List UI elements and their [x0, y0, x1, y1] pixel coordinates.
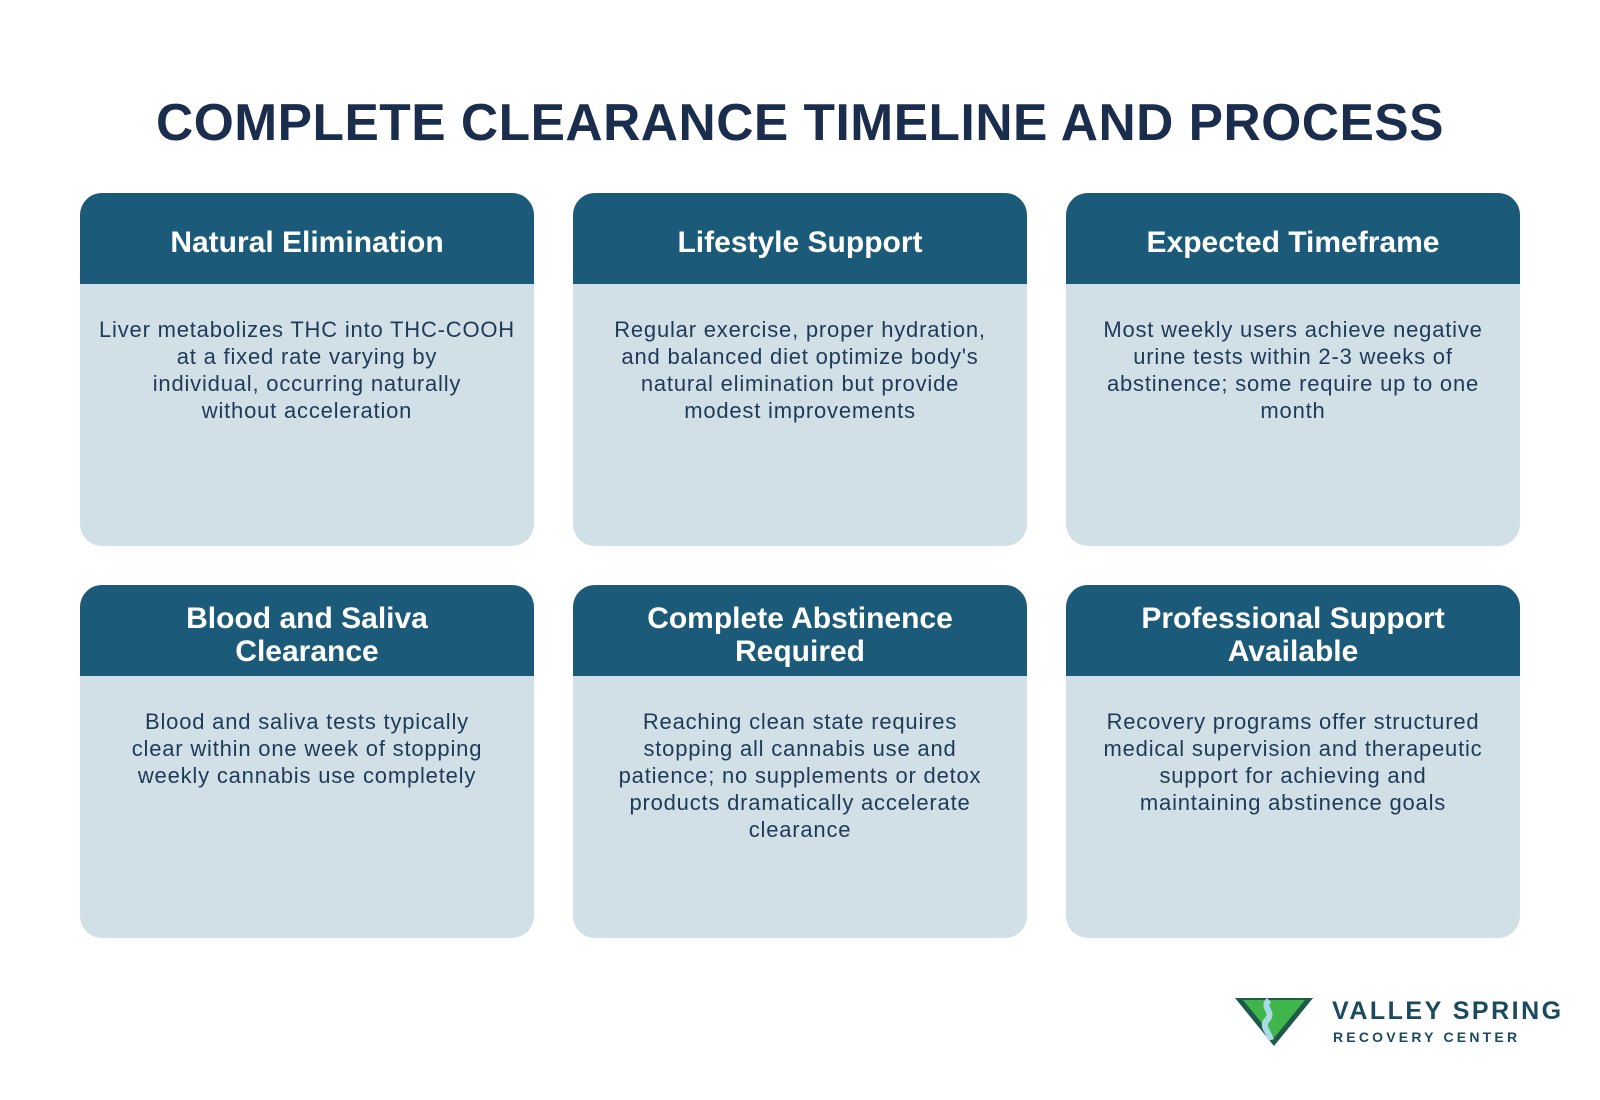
panel: lifestyle support — [573, 193, 1027, 546]
text block: maintaining abstinence goals — [1140, 790, 1446, 815]
text block: abstinence; some require up to one — [1107, 371, 1479, 396]
panel: complete abstinence — [573, 585, 1027, 938]
text block: Most weekly users achieve negative — [1103, 317, 1483, 342]
text block: individual, occurring naturally — [153, 371, 461, 396]
text block — [619, 709, 981, 842]
text block: support for achieving and — [1159, 763, 1427, 788]
heading: Professional Support — [1141, 602, 1445, 634]
text block: at a fixed rate varying by — [177, 344, 437, 369]
text block: Blood and saliva tests typically — [145, 709, 469, 734]
text block — [1103, 317, 1483, 423]
text block: natural elimination but provide — [641, 371, 959, 396]
heading: Required — [735, 634, 865, 668]
heading: Natural Elimination — [170, 226, 444, 259]
text block: urine tests within 2-3 weeks of — [1133, 344, 1453, 369]
text block: Recovery programs offer structured — [1107, 709, 1479, 734]
heading: Available — [1228, 634, 1358, 668]
text block: modest improvements — [684, 398, 916, 423]
text block: medical supervision and therapeutic — [1104, 736, 1482, 761]
text block: without acceleration — [202, 398, 412, 423]
heading — [80, 585, 534, 676]
text block: Regular exercise, proper hydration, — [614, 317, 986, 342]
logo — [1235, 997, 1564, 1046]
text block — [99, 317, 515, 423]
icon: valley triangle — [1235, 998, 1313, 1046]
heading: Expected Timeframe — [1147, 226, 1439, 259]
text block: month — [1260, 398, 1326, 423]
text block: Reaching clean state requires — [643, 709, 957, 734]
heading — [573, 193, 1027, 284]
text block: products dramatically accelerate — [629, 790, 971, 815]
text block: weekly cannabis use completely — [138, 763, 476, 788]
text block: and balanced diet optimize body's — [621, 344, 979, 369]
text block — [1104, 709, 1482, 815]
heading: Blood and Saliva — [186, 602, 428, 634]
logo text: VALLEY SPRING — [1332, 997, 1564, 1025]
panel: professional support — [1066, 585, 1520, 938]
text block: clearance — [749, 817, 851, 842]
heading — [1066, 193, 1520, 284]
text block — [614, 317, 986, 423]
title: COMPLETE CLEARANCE TIMELINE AND PROCESS — [156, 93, 1444, 151]
panel: expected timeframe — [1066, 193, 1520, 546]
text block: Liver metabolizes THC into THC-COOH — [99, 317, 515, 342]
heading — [1066, 585, 1520, 676]
heading: Lifestyle Support — [677, 226, 923, 259]
text block — [132, 709, 482, 788]
heading: Complete Abstinence — [647, 602, 953, 634]
heading — [573, 585, 1027, 676]
heading: Clearance — [235, 634, 379, 668]
logo: RECOVERY CENTER — [1333, 1029, 1520, 1045]
text block: clear within one week of stopping — [132, 736, 482, 761]
text block: patience; no supplements or detox — [619, 763, 981, 788]
text block: stopping all cannabis use and — [643, 736, 957, 761]
panel: blood and saliva — [80, 585, 534, 938]
heading — [80, 193, 534, 284]
panel: natural elimination — [80, 193, 534, 546]
